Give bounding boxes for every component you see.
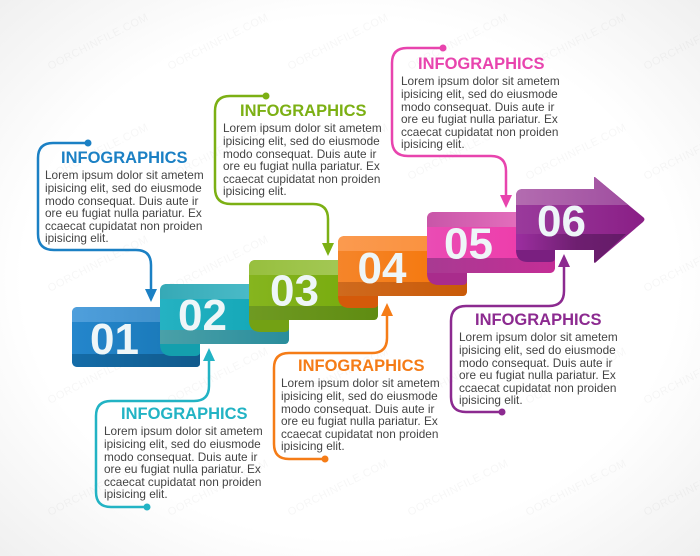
watermarks: OORCHINFILE.COM: [524, 11, 629, 73]
connector 04: orange: [274, 303, 393, 462]
body 04: modo consequat. Duis aute ir: [281, 402, 435, 416]
watermarks: OORCHINFILE.COM: [406, 121, 511, 183]
body 04: ipisicing elit, sed do eiusmode: [281, 389, 438, 403]
watermarks: OORCHINFILE.COM: [166, 345, 271, 407]
watermarks: OORCHINFILE.COM: [46, 345, 151, 407]
body 06: ipisicing elit, sed do eiusmode: [459, 343, 616, 357]
number 06: 06: [537, 197, 586, 246]
text block 01: [45, 149, 204, 245]
body 05: ipisicing elit, sed do eiusmode: [401, 87, 558, 101]
body 03: ccaecat cupidatat non proiden: [223, 172, 380, 186]
body 04: ipisicing elit.: [281, 439, 345, 453]
ribbon 06 arrow: [516, 177, 644, 263]
body 04: ccaecat cupidatat non proiden: [281, 427, 438, 441]
curl 05: [427, 273, 467, 285]
heading 06: INFOGRAPHICS: [475, 311, 602, 329]
connector 03: green: [215, 92, 334, 256]
body 04: ore eu fugiat nulla pariatur. Ex: [281, 414, 438, 428]
body 01: Lorem ipsum dolor sit ametem: [45, 168, 204, 182]
body 02: ore eu fugiat nulla pariatur. Ex: [104, 462, 261, 476]
number 05: 05: [444, 220, 493, 268]
curl 03: [249, 320, 289, 332]
body 06: ore eu fugiat nulla pariatur. Ex: [459, 368, 616, 382]
connector 01: blue: [38, 140, 157, 302]
connector 05: pink: [392, 44, 512, 208]
body 01: ipisicing elit, sed do eiusmode: [45, 181, 202, 195]
body 02: modo consequat. Duis aute ir: [104, 450, 258, 464]
text block 02: [104, 405, 263, 501]
watermarks: OORCHINFILE.COM: [286, 121, 391, 183]
watermarks: OORCHINFILE.COM: [524, 345, 629, 407]
ribbon 03: [249, 260, 378, 332]
watermarks: OORCHINFILE.COM: [166, 233, 271, 295]
number 03: 03: [270, 266, 319, 316]
curl 02: [160, 344, 200, 356]
body 05: modo consequat. Duis aute ir: [401, 100, 555, 114]
body 06: Lorem ipsum dolor sit ametem: [459, 330, 618, 344]
body 04: Lorem ipsum dolor sit ametem: [281, 376, 440, 390]
curl 06: [516, 250, 555, 262]
heading 01: INFOGRAPHICS: [61, 149, 188, 167]
body 02: ccaecat cupidatat non proiden: [104, 475, 261, 489]
body 06: modo consequat. Duis aute ir: [459, 356, 613, 370]
body 01: modo consequat. Duis aute ir: [45, 194, 199, 208]
ribbon 02: [160, 284, 289, 356]
heading 04: INFOGRAPHICS: [298, 357, 425, 375]
watermarks: OORCHINFILE.COM: [166, 121, 271, 183]
text block 04: [281, 357, 440, 453]
body 01: ccaecat cupidatat non proiden: [45, 219, 202, 233]
body 03: Lorem ipsum dolor sit ametem: [223, 121, 382, 135]
body 05: Lorem ipsum dolor sit ametem: [401, 74, 560, 88]
number 04: 04: [358, 244, 407, 293]
connector 06: purple: [451, 254, 570, 416]
body 01: ipisicing elit.: [45, 231, 109, 245]
watermarks: OORCHINFILE.COM: [46, 121, 151, 183]
body 05: ipisicing elit.: [401, 137, 465, 151]
body 01: ore eu fugiat nulla pariatur. Ex: [45, 206, 202, 220]
curl 04: [338, 296, 378, 308]
ribbon 05: [427, 212, 555, 285]
body 05: ccaecat cupidatat non proiden: [401, 125, 558, 139]
watermarks: OORCHINFILE.COM: [406, 345, 511, 407]
text block 03: [223, 102, 382, 198]
watermarks: OORCHINFILE.COM: [406, 457, 511, 519]
watermarks: OORCHINFILE.COM: [46, 11, 151, 73]
body 06: ipisicing elit.: [459, 393, 523, 407]
number 01: 01: [90, 315, 139, 364]
body 03: ipisicing elit, sed do eiusmode: [223, 134, 380, 148]
watermarks: OORCHINFILE.COM: [524, 457, 629, 519]
watermarks: OORCHINFILE.COM: [286, 345, 391, 407]
heading 05: INFOGRAPHICS: [418, 55, 545, 73]
watermarks: OORCHINFILE.COM: [46, 233, 151, 295]
body 02: ipisicing elit, sed do eiusmode: [104, 437, 261, 451]
heading 02: INFOGRAPHICS: [121, 405, 248, 423]
body 06: ccaecat cupidatat non proiden: [459, 381, 616, 395]
body 05: ore eu fugiat nulla pariatur. Ex: [401, 112, 558, 126]
body 02: Lorem ipsum dolor sit ametem: [104, 424, 263, 438]
ribbon 04: [338, 236, 467, 308]
body 03: ipisicing elit.: [223, 184, 287, 198]
number 02: 02: [178, 291, 227, 340]
connector 02: teal: [96, 348, 215, 510]
watermarks: OORCHINFILE.COM: [46, 457, 151, 519]
watermarks: OORCHINFILE.COM: [286, 457, 391, 519]
watermarks: OORCHINFILE.COM: [166, 11, 271, 73]
watermarks: OORCHINFILE.COM: [166, 457, 271, 519]
heading 03: INFOGRAPHICS: [240, 102, 367, 120]
body 03: modo consequat. Duis aute ir: [223, 147, 377, 161]
text block 05: [401, 55, 560, 151]
text block 06: [459, 311, 618, 407]
body 02: ipisicing elit.: [104, 487, 168, 501]
ribbon 01: [72, 307, 200, 367]
watermarks: OORCHINFILE.COM: [406, 11, 511, 73]
body 03: ore eu fugiat nulla pariatur. Ex: [223, 159, 380, 173]
watermarks: OORCHINFILE.COM: [524, 121, 629, 183]
watermarks: OORCHINFILE.COM: [286, 11, 391, 73]
